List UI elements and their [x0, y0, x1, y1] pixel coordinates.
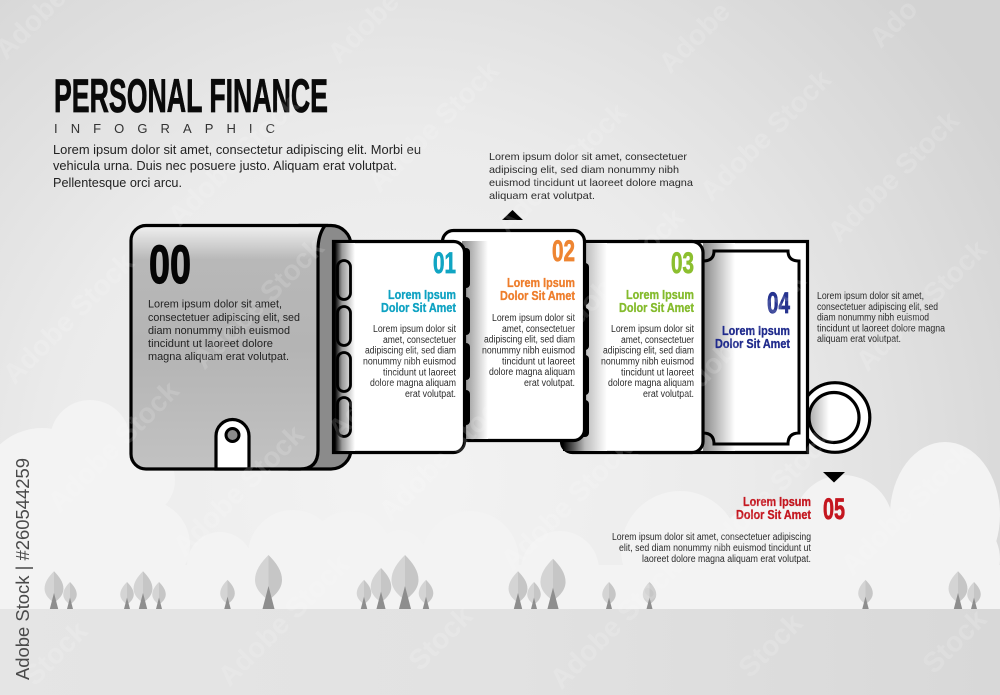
body 05: [612, 532, 811, 565]
top callout text for step 02: Lorem ipsum dolor sit amet, consectetuer: [489, 151, 688, 163]
panel: step 04 banknote: [640, 242, 808, 452]
body 03: erat volutpat.: [643, 389, 694, 400]
heading 01: Lorem Ipsum: [388, 288, 456, 302]
heading 02: Dolor Sit Amet: [500, 289, 576, 303]
body 03: tincidunt ut laoreet: [621, 368, 694, 378]
binder tabs 01: [459, 248, 470, 425]
title: PERSONAL FINANCE: [54, 69, 328, 122]
heading 05: Lorem Ipsum: [743, 495, 811, 509]
watermarks: Stock: [17, 615, 94, 691]
heading 05: [736, 495, 812, 522]
body 02: Lorem ipsum dolor sit: [492, 313, 575, 324]
watermarks: Adobe Stock: [212, 549, 355, 692]
intro text: [53, 142, 421, 190]
wallet text: diam nonummy nibh euismod: [148, 325, 290, 337]
page shadow: [563, 243, 607, 451]
body 02: nonummy nibh euismod: [482, 346, 575, 356]
number 04: 04: [767, 287, 790, 320]
watermarks: Adobe Stock: [850, 234, 993, 377]
intro text: vehicula urna. Duis nec posuere justo. Aliquam erat volutpat.: [53, 158, 397, 173]
arrow down: [823, 472, 845, 482]
stock id side label: Adobe Stock | #260544259: [13, 458, 33, 680]
body 03: Lorem ipsum dolor sit: [611, 324, 694, 335]
watermarks: Adobe Stock: [697, 422, 840, 565]
wallet text: tincidunt ut laoreet dolore: [148, 338, 273, 350]
binder rings: [338, 260, 350, 436]
body 01: adipiscing elit, sed diam: [365, 346, 456, 356]
page shadow: [335, 243, 355, 451]
body 03: nonummy nibh euismod: [601, 356, 694, 368]
body 02: [482, 313, 576, 389]
body 01: dolore magna aliquam: [370, 378, 456, 389]
watermarks: Adobe Stock: [162, 89, 305, 232]
number 05: 05: [823, 493, 845, 526]
intro text: Lorem ipsum dolor sit amet, consectetur adipiscing elit. Morbi eu: [53, 142, 421, 157]
watermarks: Adobe Stock: [167, 419, 310, 562]
heading 02: [500, 276, 576, 303]
heading 04: [715, 324, 791, 351]
ground: [0, 609, 1000, 695]
watermarks: Adobe Stock: [544, 552, 687, 695]
clouds: [0, 400, 1000, 610]
heading 01: Dolor Sit Amet: [381, 301, 457, 315]
binder tabs 02: [578, 263, 589, 437]
watermarks: Adobe Stock: [495, 433, 638, 576]
step 04 side text: tincidunt ut laoreet dolore magna: [817, 324, 945, 334]
heading 01: [381, 288, 457, 315]
body 01: Lorem ipsum dolor sit: [373, 324, 456, 335]
body 05: Lorem ipsum dolor sit amet, consectetuer adipiscing: [612, 532, 811, 543]
trees: [45, 555, 981, 609]
arrow up: [502, 210, 523, 220]
panel: step 01 page: [334, 241, 470, 453]
body 01: nonummy nibh euismod: [363, 356, 456, 368]
body 03: dolore magna aliquam: [608, 378, 694, 389]
body 02: amet, consectetuer: [502, 324, 576, 335]
watermarks: Stock: [402, 600, 479, 676]
body 01: erat volutpat.: [405, 389, 456, 400]
body 01: [363, 324, 457, 400]
panel: step 02 page: [442, 230, 589, 440]
watermarks: Adobe Stock: [669, 265, 812, 408]
watermarks: Adobe Stock: [373, 384, 516, 527]
panel: wallet: [131, 226, 351, 469]
wallet spine: [290, 226, 351, 469]
watermarks: Stock: [732, 607, 809, 683]
top callout text for step 02: [489, 151, 693, 202]
wallet text: [148, 298, 300, 363]
watermarks: Adobe Stock: [694, 64, 837, 207]
watermarks: Stock: [916, 603, 993, 679]
body 01: amet, consectetuer: [383, 335, 457, 346]
heading 03: Lorem Ipsum: [626, 288, 694, 302]
coin ring: [800, 383, 870, 452]
heading 05: Dolor Sit Amet: [736, 508, 812, 522]
heading 03: [619, 288, 695, 315]
watermarks: Adobe Stock: [0, 247, 140, 390]
step 04 side text: consectetuer adipiscing elit, sed: [817, 302, 938, 313]
step 05 callout: [612, 493, 845, 565]
body 03: amet, consectetuer: [621, 335, 695, 346]
number 00: 00: [149, 235, 191, 295]
body 02: dolore magna aliquam: [489, 367, 575, 378]
wallet text: consectetuer adipiscing elit, sed: [148, 312, 300, 324]
body 05: elit, sed diam nonummy nibh euismod tincidunt ut: [619, 543, 811, 554]
subtitle: INFOGRAPHIC: [54, 121, 275, 136]
watermarks: Adobe Stock: [322, 302, 465, 445]
top callout text for step 02: aliquam erat volutpat.: [489, 190, 595, 202]
top callout text for step 02: euismod tincidunt ut laoreet dolore magna: [489, 177, 693, 189]
wallet cover: [131, 226, 325, 469]
page shadow: [462, 241, 488, 439]
watermarks: Adobe Stock: [362, 55, 505, 198]
body 02: adipiscing elit, sed diam: [484, 334, 575, 346]
body 03: [601, 324, 695, 400]
body 05: laoreet dolore magna aliquam erat volutpat.: [642, 554, 811, 565]
step 04 side text: aliquam erat volutpat.: [817, 334, 901, 345]
panel: step 03 page: [562, 242, 703, 452]
watermarks: Adobe Stock: [42, 375, 185, 518]
body 01: tincidunt ut laoreet: [383, 368, 456, 378]
number 03: 03: [671, 247, 694, 280]
wallet text: magna aliquam erat volutpat.: [148, 351, 289, 363]
heading 04: Dolor Sit Amet: [715, 337, 791, 351]
note frame: [700, 251, 799, 444]
watermarks: Adobe Stock: [187, 232, 330, 375]
wallet text: Lorem ipsum dolor sit amet,: [148, 298, 282, 310]
heading 02: Lorem Ipsum: [507, 276, 575, 290]
heading 04: Lorem Ipsum: [722, 324, 790, 338]
wallet clasp: [216, 420, 249, 469]
watermarks: Adobe Stock: [835, 438, 978, 581]
watermarks: Adobe Stock: [490, 97, 633, 240]
number 02: 02: [552, 235, 575, 268]
number 01: 01: [433, 247, 456, 280]
body 02: erat volutpat.: [524, 378, 575, 389]
note shadow: [703, 243, 735, 451]
intro text: Pellentesque orci arcu.: [53, 175, 182, 190]
body 03: adipiscing elit, sed diam: [603, 346, 694, 356]
body 02: tincidunt ut laoreet: [502, 356, 575, 368]
step 04 side text: [817, 291, 945, 345]
watermarks: Adobe Stock: [822, 105, 965, 248]
heading 03: Dolor Sit Amet: [619, 301, 695, 315]
top callout text for step 02: adipiscing elit, sed diam nonummy nibh: [489, 164, 679, 176]
step 04 side text: Lorem ipsum dolor sit amet,: [817, 291, 924, 302]
watermarks: Adobe Stock: [547, 202, 690, 345]
step 04 side text: diam nonummy nibh euismod: [817, 312, 929, 324]
